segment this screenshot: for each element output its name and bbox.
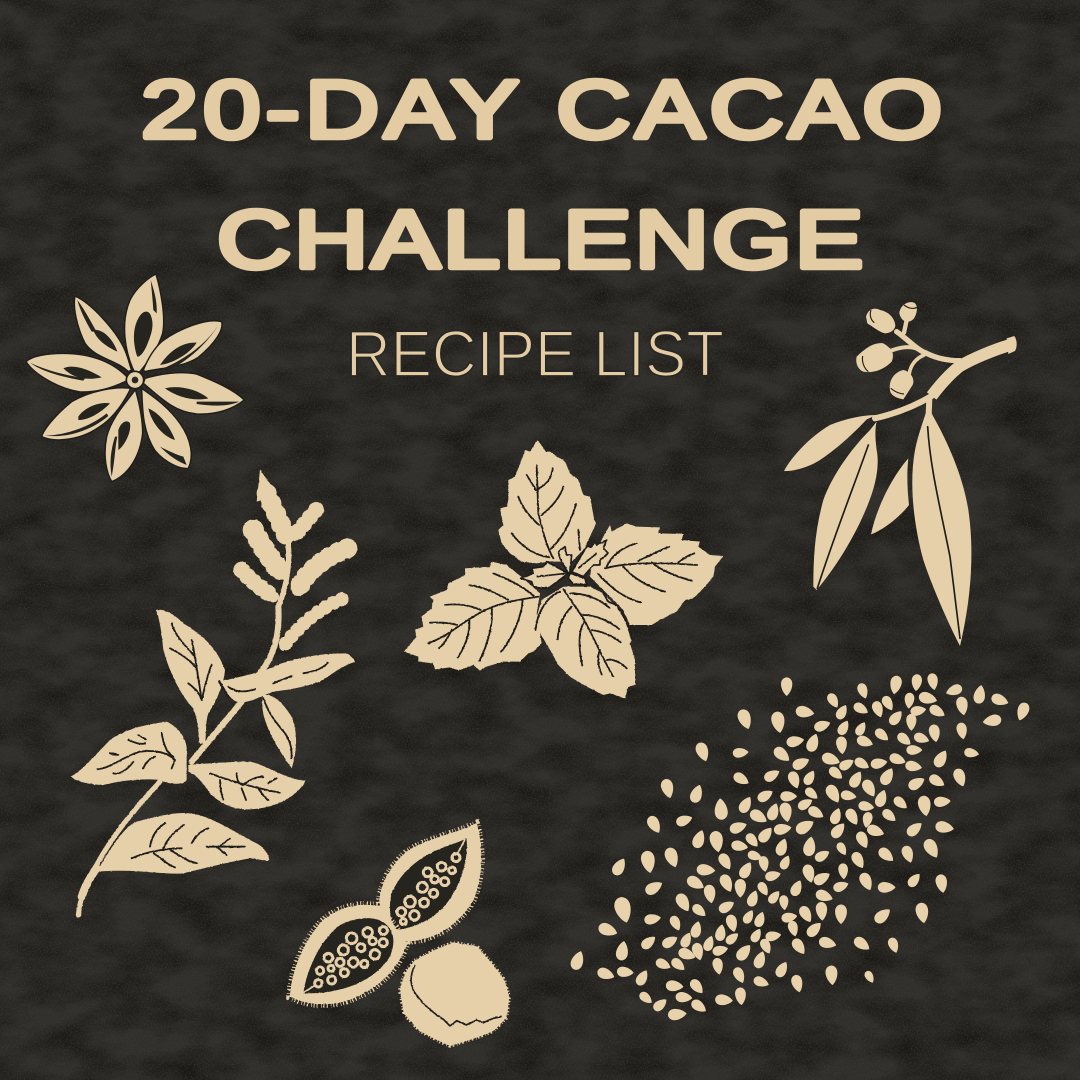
star anise centre (126, 371, 144, 389)
star anise inner pits (30, 280, 239, 477)
eucalyptus stems (875, 320, 1010, 423)
cacao pod upper (379, 823, 481, 942)
icon: cacao pods (290, 823, 508, 1045)
mint leaf shapes (404, 440, 723, 698)
eucalyptus leaves (784, 405, 971, 646)
subtitle: RECIPE LIST (346, 317, 724, 390)
title line 1: 20-DAY CACAO (141, 63, 942, 155)
eucalyptus branch end (1007, 336, 1017, 354)
mint centre sprout (521, 540, 608, 588)
title line 2: CHALLENGE (217, 193, 863, 285)
eucalyptus veins (817, 427, 960, 638)
title (141, 63, 942, 285)
cacao seeds (303, 839, 465, 993)
flower spikes (242, 493, 347, 647)
top spike tip (257, 470, 277, 502)
branch stems (78, 543, 289, 915)
tea leaves (71, 610, 355, 874)
eucalyptus bud rims (862, 305, 917, 394)
icon: mint leaves (404, 440, 723, 698)
icon: tea branch (71, 470, 355, 915)
cacao pod lower (290, 905, 407, 1004)
eucalyptus buds (856, 302, 917, 399)
icon: star anise (26, 274, 244, 482)
icon: eucalyptus branch (784, 302, 1017, 646)
cacao round nut (401, 943, 508, 1045)
mint veins (428, 465, 697, 677)
star anise petals (26, 274, 244, 482)
icon: sesame seeds (569, 673, 1031, 1021)
tea leaf veins (97, 623, 328, 867)
